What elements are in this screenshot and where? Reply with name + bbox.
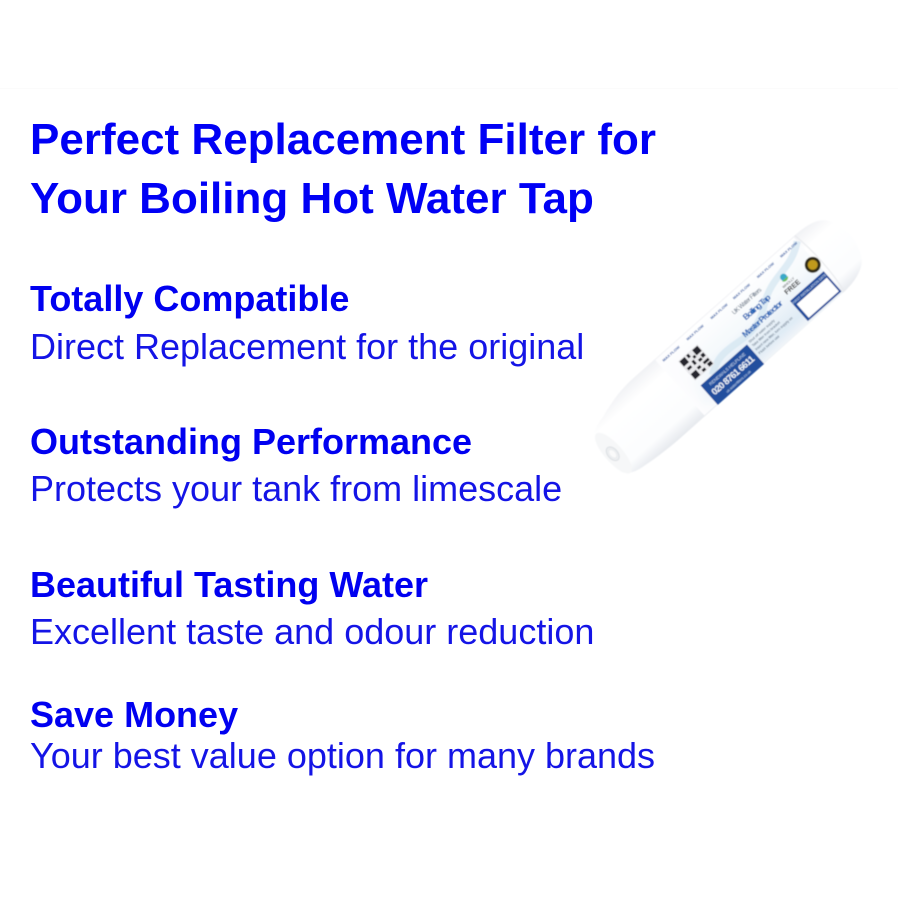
connector fitting	[590, 428, 637, 479]
instructions: Shut off water supply	[748, 319, 776, 344]
instructions: Insert new filter, turn supply on	[754, 316, 794, 351]
filter body	[578, 208, 877, 484]
logo: free badge: FREE	[784, 279, 802, 296]
instructions	[748, 309, 797, 355]
heading: Save Money	[30, 694, 238, 735]
heading: Totally Compatible	[30, 278, 349, 319]
logo: free badge	[774, 268, 802, 296]
feature: save money	[30, 694, 655, 776]
filter label: Master Protector	[740, 298, 785, 339]
helpline panel	[700, 344, 764, 405]
label tick marks: MAX FLOW	[732, 282, 751, 300]
cap seam	[795, 233, 847, 292]
heading: Beautiful Tasting Water	[30, 564, 428, 605]
description: Protects your tank from limescale	[30, 468, 562, 509]
instructions: Flush before use	[758, 334, 781, 355]
gold seal	[801, 254, 824, 276]
label tick marks: MAX FLOW	[779, 240, 798, 259]
title	[30, 115, 656, 223]
feature: outstanding performance	[30, 421, 562, 509]
label tick marks	[661, 240, 798, 363]
feature: beautiful tasting water	[30, 564, 594, 652]
filter label	[655, 235, 847, 416]
heading: Outstanding Performance	[30, 421, 472, 462]
QR code	[678, 344, 715, 381]
brand name: UK Water Filters	[732, 287, 763, 316]
feature: totally compatible	[30, 278, 584, 367]
label tick marks: MAX FLOW	[685, 323, 705, 341]
label tick marks: MAX FLOW	[661, 344, 681, 363]
description: Excellent taste and odour reduction	[30, 611, 594, 652]
description: Your best value option for many brands	[30, 735, 655, 776]
instructions: Take filter from bracket	[751, 321, 781, 348]
label tick marks: MAX FLOW	[709, 302, 729, 320]
product name: Boiling Tap	[741, 292, 773, 322]
title: Perfect Replacement Filter for	[30, 115, 656, 164]
helpline panel: RENEWALS HELPLINE	[708, 352, 747, 386]
date panel	[790, 271, 842, 321]
label tick marks: MAX FLOW	[755, 261, 775, 279]
helpline panel: uk.waterfilters.co.uk	[725, 370, 752, 394]
helpline panel: 020 8761 6611	[709, 353, 758, 398]
description: Direct Replacement for the original	[30, 326, 584, 367]
logo: free badge: WHOLLY	[782, 276, 796, 289]
title: Your Boiling Hot Water Tap	[30, 174, 594, 223]
date panel: FIRST INSTALLATION DATE	[792, 272, 828, 305]
